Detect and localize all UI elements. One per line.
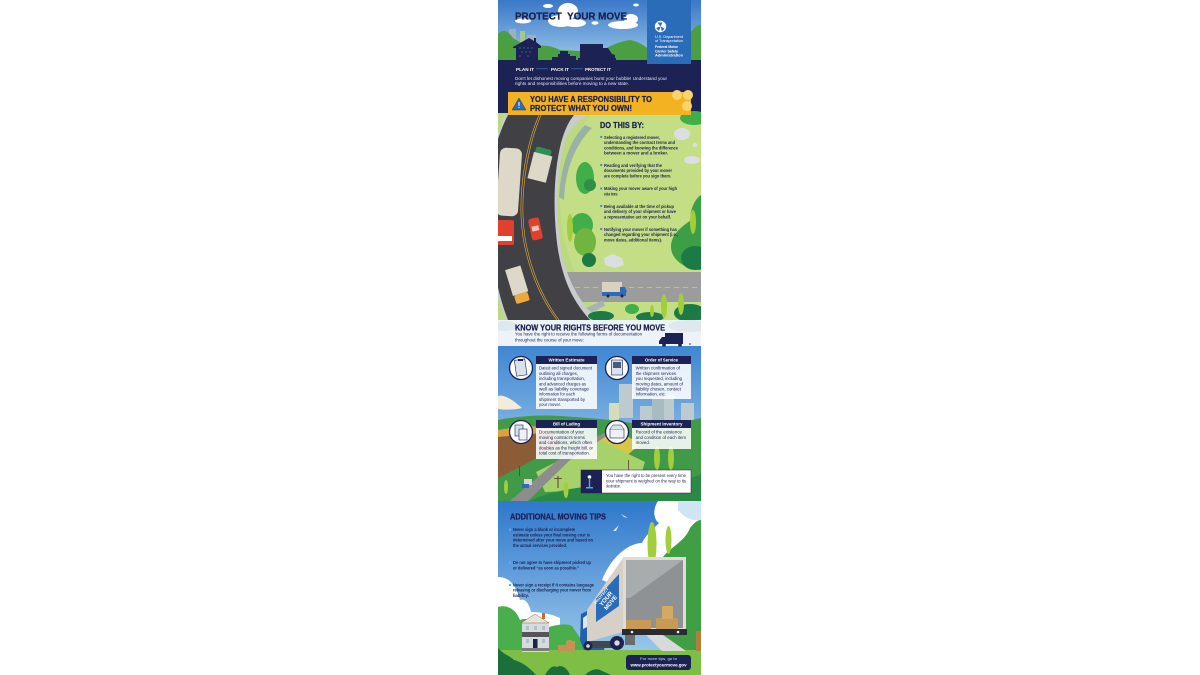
bullet: be available: a representative act on your behalf. xyxy=(604,214,671,219)
card: order of service: Order of Service xyxy=(645,358,679,362)
steps: plan, pack, protect: PACK IT xyxy=(551,67,569,72)
card: order of service: information, etc. xyxy=(636,392,666,397)
icon: warning triangle xyxy=(512,98,526,110)
banner heading xyxy=(530,96,652,112)
icon: document xyxy=(510,420,532,444)
card: shipment inventory: and condition of each item xyxy=(636,435,686,440)
intro text: rights and responsibilities before moving to a new state. xyxy=(515,81,629,86)
bullet: select mover: understanding the contract terms and xyxy=(604,140,675,145)
agency name: of Transportation xyxy=(655,39,683,43)
text xyxy=(515,332,643,342)
callout: weighing right: your shipment is weighed on the way to its xyxy=(606,478,686,483)
card: order of service: the shipment services xyxy=(636,371,676,376)
card: order of service xyxy=(606,356,691,399)
illustration: moving truck: MOVE xyxy=(604,595,619,612)
callout: weighing right xyxy=(581,470,691,493)
tip: blank estimate: determined after your move and based on xyxy=(513,538,593,543)
bullet: notify mover: move dates, additional items). xyxy=(604,237,662,242)
tip: blank estimate: Never sign a blank or incomplete xyxy=(513,527,576,532)
vehicles on road xyxy=(495,146,627,305)
banner heading: YOU HAVE A RESPONSIBILITY TO xyxy=(530,94,652,104)
tip: blank estimate: estimate unless your final moving cost is xyxy=(513,532,591,537)
bullet: verify documents: are complete before you sign them. xyxy=(604,174,671,178)
card: bill of lading: Bill of Lading xyxy=(553,422,580,426)
tip: receipt: releasing or discharging your mover from xyxy=(513,588,591,593)
heading: KNOW YOUR RIGHTS BEFORE YOU MOVE xyxy=(515,322,665,332)
banner heading: PROTECT WHAT YOU OWN! xyxy=(530,103,632,113)
tip: blank estimate xyxy=(509,527,593,548)
intro text: Don't let dishonest moving companies burst your bubble! Understand your xyxy=(515,76,668,81)
icon: truck xyxy=(659,333,691,347)
panel: do this by xyxy=(600,120,679,242)
icon: moving truck xyxy=(578,44,616,60)
tip: as soon as possible xyxy=(509,560,591,570)
card: written estimate: Dated and signed document xyxy=(539,366,593,371)
callout: responsibility banner xyxy=(508,90,693,115)
intro text xyxy=(515,76,668,86)
panel: USDOT FMCSA logo block xyxy=(647,0,691,64)
agency name: Federal Motor xyxy=(655,44,678,49)
card: bill of lading: moving contract's terms xyxy=(539,435,585,440)
card: written estimate: Written Estimate xyxy=(548,358,585,362)
panel: additional tips scene xyxy=(498,501,701,675)
agency name: U.S. Department xyxy=(655,35,684,39)
panel: know your rights heading xyxy=(493,320,712,347)
tip: blank estimate: the actual services provided. xyxy=(513,543,567,548)
steps: plan, pack, protect: PLAN IT xyxy=(516,67,534,72)
bullet: notify mover xyxy=(600,227,678,242)
agency name xyxy=(655,36,683,56)
icon: form xyxy=(606,356,628,380)
callout: website: www.protectyourmove.gov xyxy=(629,662,687,668)
bullet: be available: and delivery of your shipment or have xyxy=(604,209,677,214)
panel: road scene xyxy=(488,111,709,322)
icon: moving boxes on lawn xyxy=(558,640,575,651)
bullet: high value items: value items. xyxy=(604,192,618,196)
steps: plan, pack, protect xyxy=(516,68,611,71)
panel: tips heading: ADDITIONAL MOVING TIPS xyxy=(510,511,606,521)
text: You have the right to receive the following forms of documentation xyxy=(515,332,643,336)
agency name: Carrier Safety xyxy=(655,48,679,53)
card: order of service: moving dates, amount of xyxy=(636,381,684,386)
card: written estimate: outlining all charges, xyxy=(539,371,578,376)
bullet: select mover xyxy=(600,135,679,156)
card: bill of lading: Documentation of your xyxy=(539,430,585,435)
icon: house illustration xyxy=(521,613,549,652)
icon: inventory box xyxy=(606,420,628,444)
bullet: verify documents: Reading and verifying that the xyxy=(604,163,663,168)
card: bill of lading: total cost of transportation. xyxy=(539,450,590,456)
card: bill of lading: doubles as the freight bill, or xyxy=(539,445,594,450)
card: written estimate: information for each xyxy=(539,392,576,397)
cross road xyxy=(560,272,701,302)
card: order of service: liability chosen, contact xyxy=(636,386,682,392)
icon: moving boxes xyxy=(552,51,576,61)
bullet: notify mover: changed regarding your shipment (i.e., xyxy=(604,232,678,237)
callout: website: For more tips, go to xyxy=(640,656,678,661)
card: shipment inventory: Shipment Inventory xyxy=(640,422,683,426)
tips list xyxy=(509,527,595,598)
panel: intro band xyxy=(498,60,701,116)
illustration: moving truck: PROTECT xyxy=(594,586,610,605)
title: PROTECT YOUR MOVE xyxy=(515,10,627,22)
icon: scale xyxy=(586,475,593,488)
card: bill of lading: and conditions, which often xyxy=(539,440,593,445)
card: written estimate: your mover. xyxy=(539,402,561,407)
bullet: select mover: Selecting a registered mover, xyxy=(604,135,660,140)
bullet: high value items xyxy=(600,186,677,196)
heading: DO THIS BY: xyxy=(600,120,644,130)
panel: header xyxy=(498,0,701,62)
text: throughout the course of your move: xyxy=(515,337,584,342)
bullet: high value items: Making your mover aware of your high xyxy=(604,186,677,191)
icon: clipboard xyxy=(510,356,532,380)
bullet: select mover: conditions, and knowing the difference xyxy=(604,145,679,150)
bullet: select mover: between a mover and a broker. xyxy=(604,151,668,156)
bullet: verify documents xyxy=(600,163,672,178)
callout: website xyxy=(626,655,691,670)
steps: plan, pack, protect: PROTECT IT xyxy=(585,67,611,72)
callout: weighing right: destination. xyxy=(606,484,621,489)
card: shipment inventory xyxy=(606,420,691,449)
tip: receipt: liability. xyxy=(513,593,529,598)
bullet: notify mover: Notifying your mover if something has xyxy=(604,227,678,232)
bullet: verify documents: documents provided by your mover xyxy=(604,168,672,173)
card: written estimate: shipment transported by xyxy=(539,397,586,402)
tip: receipt: Never sign a receipt if it contains language xyxy=(513,582,595,587)
panel: rights documents scene xyxy=(498,346,701,501)
tip: receipt xyxy=(509,582,595,598)
card: bill of lading xyxy=(510,420,597,459)
card: shipment inventory: Record of the existence xyxy=(636,430,683,435)
icon: house xyxy=(513,38,541,60)
bullet: be available xyxy=(600,204,677,219)
card: written estimate: well as liability coverage xyxy=(539,386,590,392)
tip: as soon as possible: Do not agree to have shipment picked up xyxy=(513,560,591,565)
main curved road xyxy=(498,115,593,320)
bullet: be available: Being available at the time of pickup xyxy=(604,204,674,209)
card: written estimate xyxy=(510,356,597,409)
card: order of service: you requested, including xyxy=(636,376,683,381)
card: order of service: Written confirmation of xyxy=(636,366,681,371)
trees and bushes xyxy=(567,111,709,322)
card: written estimate: and advanced charges as xyxy=(539,381,586,386)
agency name: Administration xyxy=(655,53,684,58)
callout: weighing right: You have the right to be present every time xyxy=(606,473,687,478)
illustration: moving truck xyxy=(580,557,701,651)
illustration: moving truck: YOUR xyxy=(599,590,615,608)
icon: DOT triskelion xyxy=(655,21,666,32)
tip: as soon as possible: or delivered “as soon as possible.” xyxy=(513,565,579,570)
rocks xyxy=(586,128,700,312)
card: written estimate: including transportation, xyxy=(539,376,585,381)
card: shipment inventory: moved. xyxy=(636,440,650,445)
